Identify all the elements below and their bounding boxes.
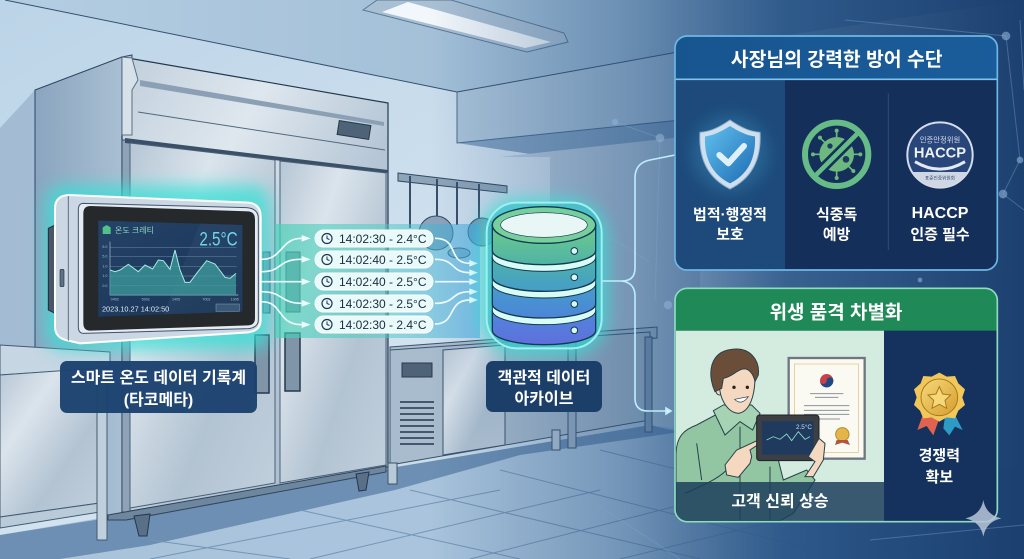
- sickness caption: 식중독: [816, 206, 858, 223]
- log entry 1: 14:02:30 - 2.4°C: [339, 232, 427, 246]
- panel heading: [675, 36, 997, 79]
- panel: hygiene differentiation: [675, 288, 1001, 537]
- log entry 5: 14:02:30 - 2.4°C: [339, 318, 427, 332]
- shield caption: 법적·행정적: [693, 206, 767, 223]
- database glow: [478, 198, 608, 356]
- log entry 4: 14:02:30 - 2.5°C: [339, 297, 427, 311]
- sickness caption: [816, 206, 858, 243]
- light fixture: [363, 0, 568, 52]
- timestamp: 2023.10.27 14:02:50: [102, 304, 169, 313]
- line chart: 5002: [142, 298, 150, 302]
- shield caption: 보호: [716, 226, 744, 243]
- medal caption: 확보: [926, 469, 953, 486]
- temperature reading: 2.5°C: [199, 229, 238, 250]
- shield caption: [693, 206, 767, 243]
- line chart: 0402: [111, 298, 119, 302]
- line chart: 7002: [202, 298, 210, 302]
- archive label: [486, 361, 602, 412]
- navy overlay on the right: [430, 0, 1024, 559]
- arrows log to database: [435, 238, 478, 324]
- HACCP caption: [910, 205, 970, 243]
- caption band: [676, 482, 884, 521]
- refrigerator: [35, 55, 388, 536]
- logger label: 스마트 온도 데이터 기록계: [71, 369, 246, 387]
- database icon: [487, 203, 602, 348]
- connector lines: [602, 155, 675, 414]
- HACCP caption: HACCP: [912, 205, 969, 222]
- HACCP caption: 인증 필수: [910, 226, 970, 243]
- arrows device to log: [262, 235, 311, 328]
- line chart: 1405: [172, 298, 180, 302]
- panel heading: 위생 품격 차별화: [770, 301, 902, 323]
- log entry 2: 14:02:40 - 2.5°C: [339, 253, 427, 267]
- line chart: 5.0: [102, 245, 107, 249]
- under-counter fridge: [388, 327, 657, 484]
- left work table: [0, 345, 110, 540]
- sparkle: [965, 500, 1001, 537]
- panel heading: 사장님의 강력한 방어 수단: [731, 49, 943, 71]
- logger label: [60, 361, 257, 413]
- icon: HACCP badge: HACCP: [914, 145, 966, 161]
- line chart: 1.0: [102, 274, 107, 278]
- panel heading: [675, 288, 997, 331]
- icon: HACCP badge: 인증안정위원: [920, 136, 960, 145]
- archive label: 객관적 데이터: [498, 369, 590, 387]
- line chart: 1005: [231, 298, 239, 302]
- icon: gold medal: [914, 373, 965, 435]
- log entry 3: 14:02:40 - 2.5°C: [339, 275, 427, 289]
- caption band: 고객 신뢰 상승: [731, 493, 829, 511]
- icon: HACCP badge: [907, 122, 973, 188]
- line chart: 0.0: [102, 284, 107, 288]
- medal caption: 경쟁력: [919, 448, 960, 465]
- line chart: 5.0: [102, 254, 107, 258]
- utensil rack: [398, 173, 507, 258]
- line chart: 1.0: [102, 264, 107, 268]
- log entries: [315, 230, 433, 333]
- icon: HACCP badge: 표준인증위원회: [925, 174, 955, 181]
- panel: defense measures: [675, 36, 997, 270]
- icon: shield: [692, 115, 768, 192]
- network decoration: [545, 20, 1024, 559]
- sickness caption: 예방: [823, 226, 851, 243]
- medal caption: [919, 448, 960, 486]
- icon: no germs: [805, 123, 868, 186]
- panel controls: [337, 121, 371, 139]
- device glow: [45, 185, 270, 350]
- logger label: (타코메타): [124, 391, 193, 409]
- tablet: [757, 415, 825, 477]
- person: [676, 349, 815, 521]
- tablet: 2.5°C: [796, 423, 812, 431]
- certificate: [789, 358, 865, 459]
- temperature logger device: [48, 195, 261, 343]
- line chart: [102, 242, 239, 302]
- screen title: 온도 크레티: [115, 226, 154, 235]
- archive label: 아카이브: [515, 390, 574, 408]
- data flow band: [275, 224, 480, 338]
